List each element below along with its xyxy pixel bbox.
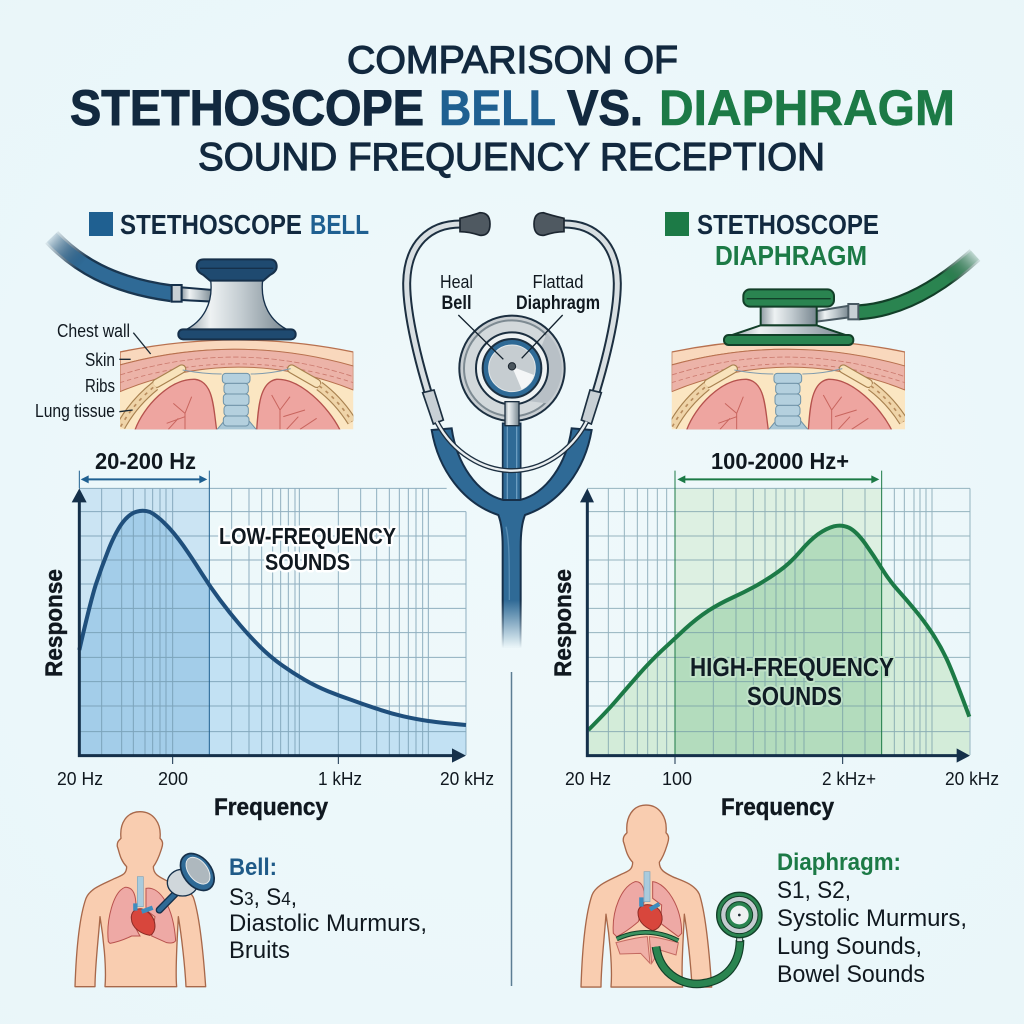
grid xyxy=(587,488,970,755)
chest layer labels: Ribs xyxy=(85,376,115,396)
response curve xyxy=(588,526,969,730)
title: BELL xyxy=(439,80,556,136)
axes xyxy=(587,498,958,756)
heading: stethoscope diaphragm: STETHOSCOPE xyxy=(697,209,879,240)
low-frequency label: LOW-FREQUENCY xyxy=(219,523,396,549)
x axis ticks xyxy=(57,769,494,789)
text block: diaphragm sounds: Bowel Sounds xyxy=(777,961,925,988)
chart: diaphragm frequency response xyxy=(550,448,999,821)
range label: 20-200 Hz xyxy=(95,448,196,474)
diaphragm tube xyxy=(656,940,740,984)
chest layer labels: Skin xyxy=(85,350,115,370)
low-frequency label: SOUNDS xyxy=(265,549,350,575)
range label: 100-2000 Hz+ xyxy=(711,448,849,474)
title: VS. xyxy=(567,80,643,136)
text block: diaphragm sounds: Diaphragm: xyxy=(777,849,901,876)
x axis ticks: 20 kHz xyxy=(440,769,494,789)
y axis label: Response xyxy=(550,569,577,677)
x axis ticks: 100 xyxy=(662,769,692,789)
x axis ticks xyxy=(565,769,999,789)
leader lines xyxy=(119,333,151,412)
part labels: Heal xyxy=(440,272,473,292)
heading: stethoscope diaphragm xyxy=(665,209,879,271)
response curve xyxy=(79,511,466,725)
title: DIAPHRAGM xyxy=(659,80,955,136)
ear tubes xyxy=(407,224,617,397)
y axis label: Response xyxy=(41,569,68,677)
x axis ticks: 20 Hz xyxy=(57,769,103,789)
ear tubes, chest piece xyxy=(407,213,617,471)
low-frequency label xyxy=(219,523,396,575)
text block: bell sounds xyxy=(229,854,427,964)
high-frequency label xyxy=(690,652,894,711)
title: STETHOSCOPE xyxy=(70,80,424,136)
bell icon xyxy=(159,847,221,910)
text block: diaphragm sounds: Systolic Murmurs, xyxy=(777,905,967,932)
lungs xyxy=(108,887,176,943)
part labels: Flattad xyxy=(532,272,584,292)
diaphragm chest piece xyxy=(724,289,858,345)
lungs xyxy=(613,882,682,963)
trachea xyxy=(137,877,143,907)
high-frequency label: HIGH-FREQUENCY xyxy=(690,652,894,682)
diaphragm icon xyxy=(717,892,762,942)
high-frequency label: SOUNDS xyxy=(747,681,842,711)
x axis label: Frequency xyxy=(721,794,835,821)
central stethoscope xyxy=(407,213,617,648)
center divider xyxy=(510,672,512,986)
part labels: Bell xyxy=(442,293,472,314)
chest piece disc xyxy=(459,316,565,426)
metal sleeves xyxy=(423,390,601,424)
heading: stethoscope diaphragm: DIAPHRAGM xyxy=(715,240,867,271)
text block: diaphragm sounds: Lung Sounds, xyxy=(777,933,922,960)
bell tube xyxy=(52,237,172,293)
title xyxy=(70,39,955,179)
leader lines xyxy=(458,315,563,359)
figure: body with bell xyxy=(75,812,221,987)
x axis ticks: 20 Hz xyxy=(565,769,611,789)
range arrow xyxy=(83,476,205,482)
trachea xyxy=(644,872,650,902)
chart: bell frequency response xyxy=(41,448,494,821)
chest layer labels: Lung tissue xyxy=(35,401,115,421)
chest cross-section xyxy=(672,340,905,430)
range arrow xyxy=(680,476,877,482)
chest cross-section xyxy=(120,340,353,430)
panel: bell illustration on chest xyxy=(52,237,353,430)
bell chest piece xyxy=(172,259,296,339)
x axis ticks: 200 xyxy=(158,769,188,789)
part labels xyxy=(440,272,600,314)
x axis label: Frequency xyxy=(214,794,329,821)
heading: stethoscope bell: BELL xyxy=(310,209,369,240)
text block: bell sounds: Diastolic Murmurs, xyxy=(229,910,427,937)
figure: body with diaphragm xyxy=(581,805,762,987)
x axis ticks: 2 kHz+ xyxy=(822,769,876,789)
text block: diaphragm sounds xyxy=(777,849,967,988)
heading: stethoscope bell: STETHOSCOPE xyxy=(120,209,302,240)
grid xyxy=(79,488,466,755)
chest layer labels: Chest wall xyxy=(57,321,130,341)
text block: bell sounds: Bruits xyxy=(229,937,290,964)
x axis ticks: 20 kHz xyxy=(945,769,999,789)
diaphragm tube xyxy=(858,255,975,312)
title: COMPARISON OF xyxy=(347,39,678,82)
axes xyxy=(79,498,455,756)
heart xyxy=(131,903,155,935)
chest layer labels xyxy=(35,321,130,421)
part labels: Diaphragm xyxy=(516,293,600,314)
panel: diaphragm illustration on chest xyxy=(672,255,975,430)
diaphragm band xyxy=(617,932,678,941)
earpieces xyxy=(460,213,490,235)
x axis ticks: 1 kHz xyxy=(318,769,362,789)
thin metal arc xyxy=(437,422,587,471)
lower Y tube and stem xyxy=(432,423,592,648)
text block: bell sounds: Bell: xyxy=(229,854,277,881)
title: SOUND FREQUENCY RECEPTION xyxy=(198,136,825,179)
text block: diaphragm sounds: S1, S2, xyxy=(777,877,851,904)
heart xyxy=(638,897,662,931)
text block: bell sounds: S3, S4, xyxy=(229,884,297,911)
